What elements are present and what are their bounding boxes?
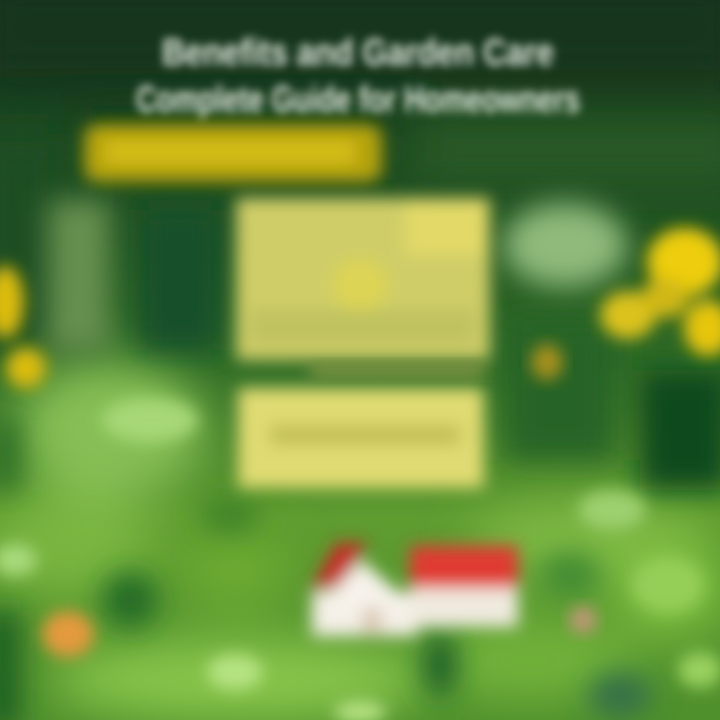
title: Complete Guide for Homeowners: [136, 79, 580, 121]
title: Benefits and Garden Care: [162, 32, 554, 74]
yellow banner: [84, 124, 382, 182]
flowers: yellow at right: [600, 228, 720, 356]
flower: pink at lower right: [569, 606, 597, 634]
divider shadow between cards: [310, 362, 485, 378]
foliage: bright highlights: [0, 398, 720, 720]
flower: orange at lower left: [42, 611, 94, 657]
foliage: dark shadows: [0, 210, 720, 720]
foliage: pale column at left: [48, 200, 110, 350]
panel: upper yellow card: [236, 198, 490, 360]
title: [136, 32, 580, 121]
panel: lower yellow card: [238, 388, 484, 488]
foliage: pale patch at right: [503, 203, 627, 287]
flower: small amber at centre right: [531, 344, 563, 380]
icon: house: [310, 543, 518, 636]
flowers: yellow at left: [0, 266, 46, 388]
